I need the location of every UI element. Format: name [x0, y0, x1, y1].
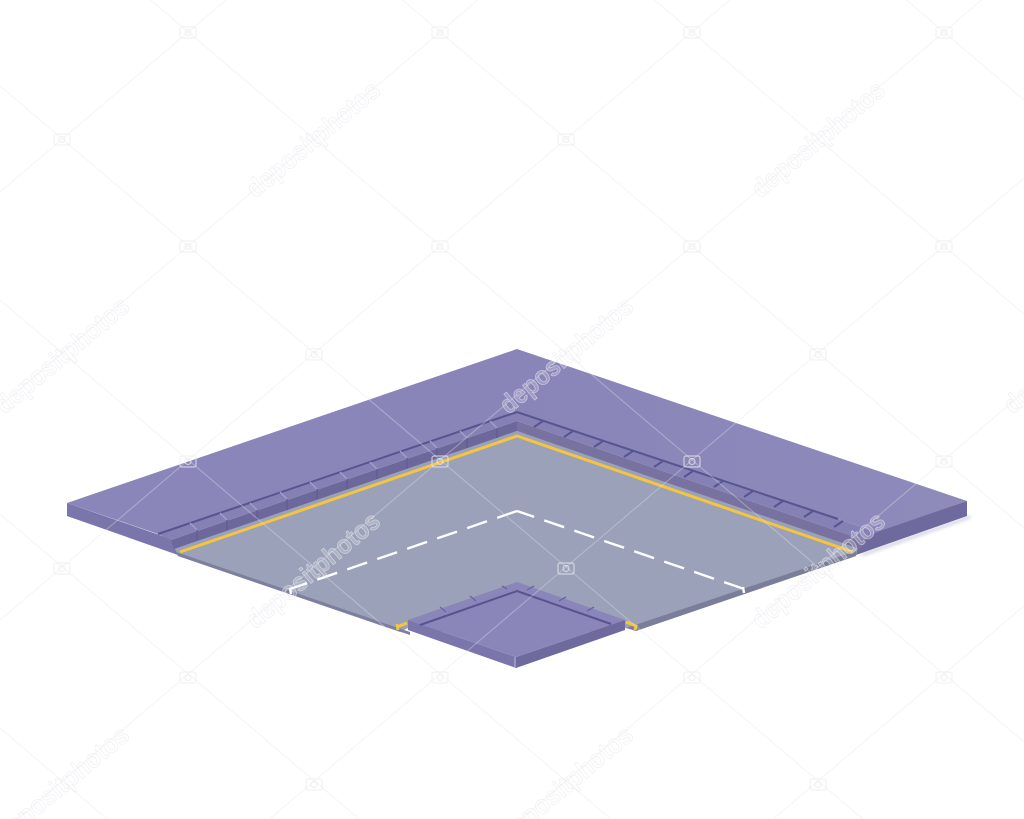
ground shadow — [862, 517, 970, 555]
brick joints: left lower face — [197, 428, 497, 540]
watermark text: depositphotos — [745, 505, 891, 635]
yellow line: back edge — [180, 436, 853, 552]
curb groove line — [158, 412, 838, 534]
brick joints: left — [190, 421, 497, 530]
watermark text: depositphotos — [240, 505, 386, 635]
slab front face: left — [67, 503, 178, 555]
block face: left — [408, 620, 516, 668]
curb top: right — [517, 412, 877, 540]
watermark text: depositphotos — [493, 290, 639, 420]
main road surface — [172, 431, 860, 640]
block top surface — [408, 582, 625, 657]
slab top surface — [67, 349, 967, 534]
road left rim — [176, 552, 410, 635]
road right rim — [626, 551, 856, 631]
corner sidewalk block — [408, 582, 625, 668]
block edge highlight — [514, 657, 516, 667]
curb inner face: right — [517, 421, 864, 549]
white dashed centre line: left — [290, 511, 517, 589]
slab front face: right — [856, 501, 967, 555]
watermark text: depositphotos — [745, 74, 891, 204]
yellow line stubs beside corner block — [397, 622, 636, 630]
watermark text: depositphotos — [240, 74, 386, 204]
block groove — [420, 591, 611, 625]
brick joints: right — [534, 421, 843, 527]
curb top: left — [158, 412, 517, 540]
block face: right — [516, 620, 625, 668]
white dashed centre line: right — [517, 511, 744, 589]
back sidewalk slab — [67, 349, 967, 555]
block brick joints — [440, 586, 594, 612]
dashed line end ticks — [290, 587, 744, 594]
curb inner face: left — [171, 421, 517, 549]
